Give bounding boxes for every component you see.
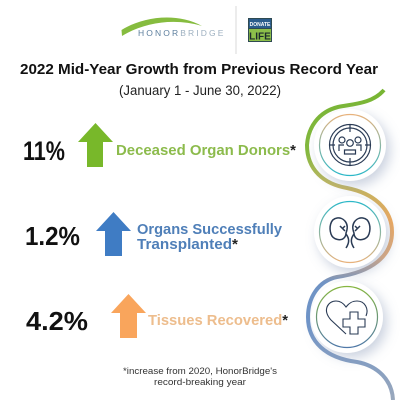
- footnote: record-breaking year: [154, 377, 246, 388]
- arrow: orange up: [111, 294, 146, 338]
- label: tissues recovered: Tissues Recovered*: [148, 313, 288, 329]
- stat: 4.2%: 4.2%: [26, 306, 88, 336]
- label: organs successfully transplanted: Transplanted *: [137, 237, 238, 253]
- logo swoosh: [122, 17, 202, 36]
- icon badge: heart with cross: [311, 281, 383, 353]
- icon badge: people target: [314, 109, 386, 181]
- logo: Donate Life: [248, 18, 272, 42]
- row 3: tissues: [26, 294, 288, 338]
- footnote: *increase from 2020, HonorBridge's: [123, 366, 277, 377]
- logo wordmark: HONORBRIDGE: [138, 28, 225, 38]
- stat: 11%: 11%: [23, 136, 65, 166]
- arrow: green up: [78, 123, 113, 167]
- row 2: organs: [25, 212, 282, 256]
- arrow: blue up: [96, 212, 131, 256]
- winding gradient ribbon: [307, 90, 393, 400]
- icon badge: kidneys: [314, 196, 386, 268]
- logo: HonorBridge: [122, 17, 225, 38]
- subtitle: (January 1 - June 30, 2022): [119, 83, 281, 98]
- label: organs successfully transplanted: Organs Successfully: [137, 222, 282, 238]
- title: 2022 Mid-Year Growth from Previous Record Year: [20, 61, 378, 78]
- label: deceased organ donors: Deceased Organ Donors *: [116, 143, 296, 159]
- donate text: DONATE: [250, 22, 271, 28]
- stat: 1.2%: 1.2%: [25, 221, 80, 251]
- life text: LIFE: [249, 32, 271, 42]
- row 1: donors: [23, 123, 296, 167]
